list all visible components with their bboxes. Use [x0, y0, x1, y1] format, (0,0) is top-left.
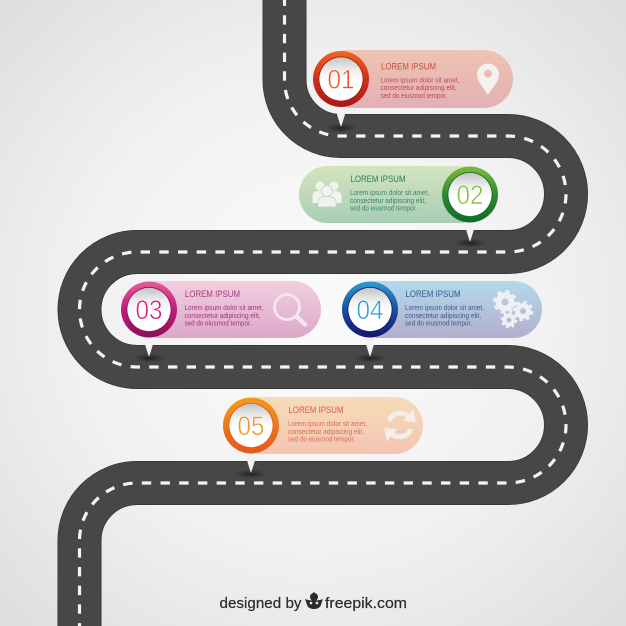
- step 05: [223, 397, 423, 478]
- heading 05: LOREM IPSUM: [288, 405, 344, 415]
- body 04: sed do eiusmod tempor.: [405, 320, 472, 327]
- badge 01: 01: [328, 64, 354, 94]
- badge 04: [342, 282, 398, 338]
- badge 03: 03: [136, 295, 162, 325]
- icon: people: [312, 182, 342, 207]
- road centre dashes: [80, 0, 566, 626]
- icon: freepik logo: [305, 592, 323, 609]
- body 03: consectetur adipiscing elit,: [184, 313, 261, 320]
- pin 02: [454, 219, 486, 248]
- icon: refresh arrows: [384, 409, 416, 441]
- badge 01: [313, 51, 369, 107]
- pill 05: [231, 397, 423, 454]
- footer credit: freepik.com: [325, 596, 407, 612]
- body 04: [405, 305, 484, 327]
- body 02: Lorem ipsum dolor sit amet,: [350, 190, 429, 197]
- heading 04: LOREM IPSUM: [406, 289, 460, 299]
- step 04: [342, 281, 542, 362]
- icon: magnifier: [274, 294, 305, 324]
- pin 04: [354, 334, 386, 362]
- heading 01: LOREM IPSUM: [381, 62, 436, 72]
- pill 03: [129, 281, 321, 338]
- badge 02: [442, 166, 498, 222]
- pin 01: [325, 104, 357, 132]
- body 03: [184, 305, 264, 327]
- body 01: [380, 77, 460, 100]
- badge 03: [121, 282, 177, 338]
- body 02: sed do eiusmod tempor.: [350, 205, 417, 212]
- body 02: consectetur adipiscing elit,: [350, 198, 426, 205]
- step 02: [299, 166, 498, 248]
- winding road: [80, 0, 566, 626]
- footer credit: designed by: [220, 596, 302, 612]
- body 05: [288, 421, 367, 443]
- body 05: Lorem ipsum dolor sit amet,: [288, 421, 367, 428]
- badge 05: 05: [238, 411, 264, 441]
- footer credit: [220, 592, 407, 612]
- body 02: [350, 190, 429, 212]
- body 04: consectetur adipiscing elit,: [405, 313, 481, 320]
- pin 03: [133, 334, 165, 362]
- body 04: Lorem ipsum dolor sit amet,: [405, 305, 484, 312]
- badge 02: 02: [456, 180, 484, 210]
- badge 04: 04: [356, 295, 384, 325]
- badge 05: [223, 398, 279, 454]
- body 01: sed do eiusmod tempor.: [380, 93, 448, 100]
- body 03: sed do eiusmod tempor.: [184, 320, 252, 327]
- heading 02: LOREM IPSUM: [350, 174, 406, 184]
- body 03: Lorem ipsum dolor sit amet,: [184, 305, 264, 312]
- pin 05: [235, 450, 267, 478]
- body 01: consectetur adipiscing elit,: [380, 85, 457, 92]
- icon: gears: [494, 292, 532, 327]
- body 05: consectetur adipiscing elit,: [288, 429, 364, 436]
- body 01: Lorem ipsum dolor sit amet,: [380, 77, 460, 84]
- pill 01: [320, 50, 513, 108]
- step 01: [313, 50, 513, 132]
- step 03: [121, 281, 321, 362]
- pill 04: [350, 281, 542, 338]
- pill 02: [299, 166, 491, 223]
- body 05: sed do eiusmod tempor.: [288, 436, 355, 443]
- icon: map pin: [477, 64, 499, 95]
- heading 03: LOREM IPSUM: [185, 289, 240, 299]
